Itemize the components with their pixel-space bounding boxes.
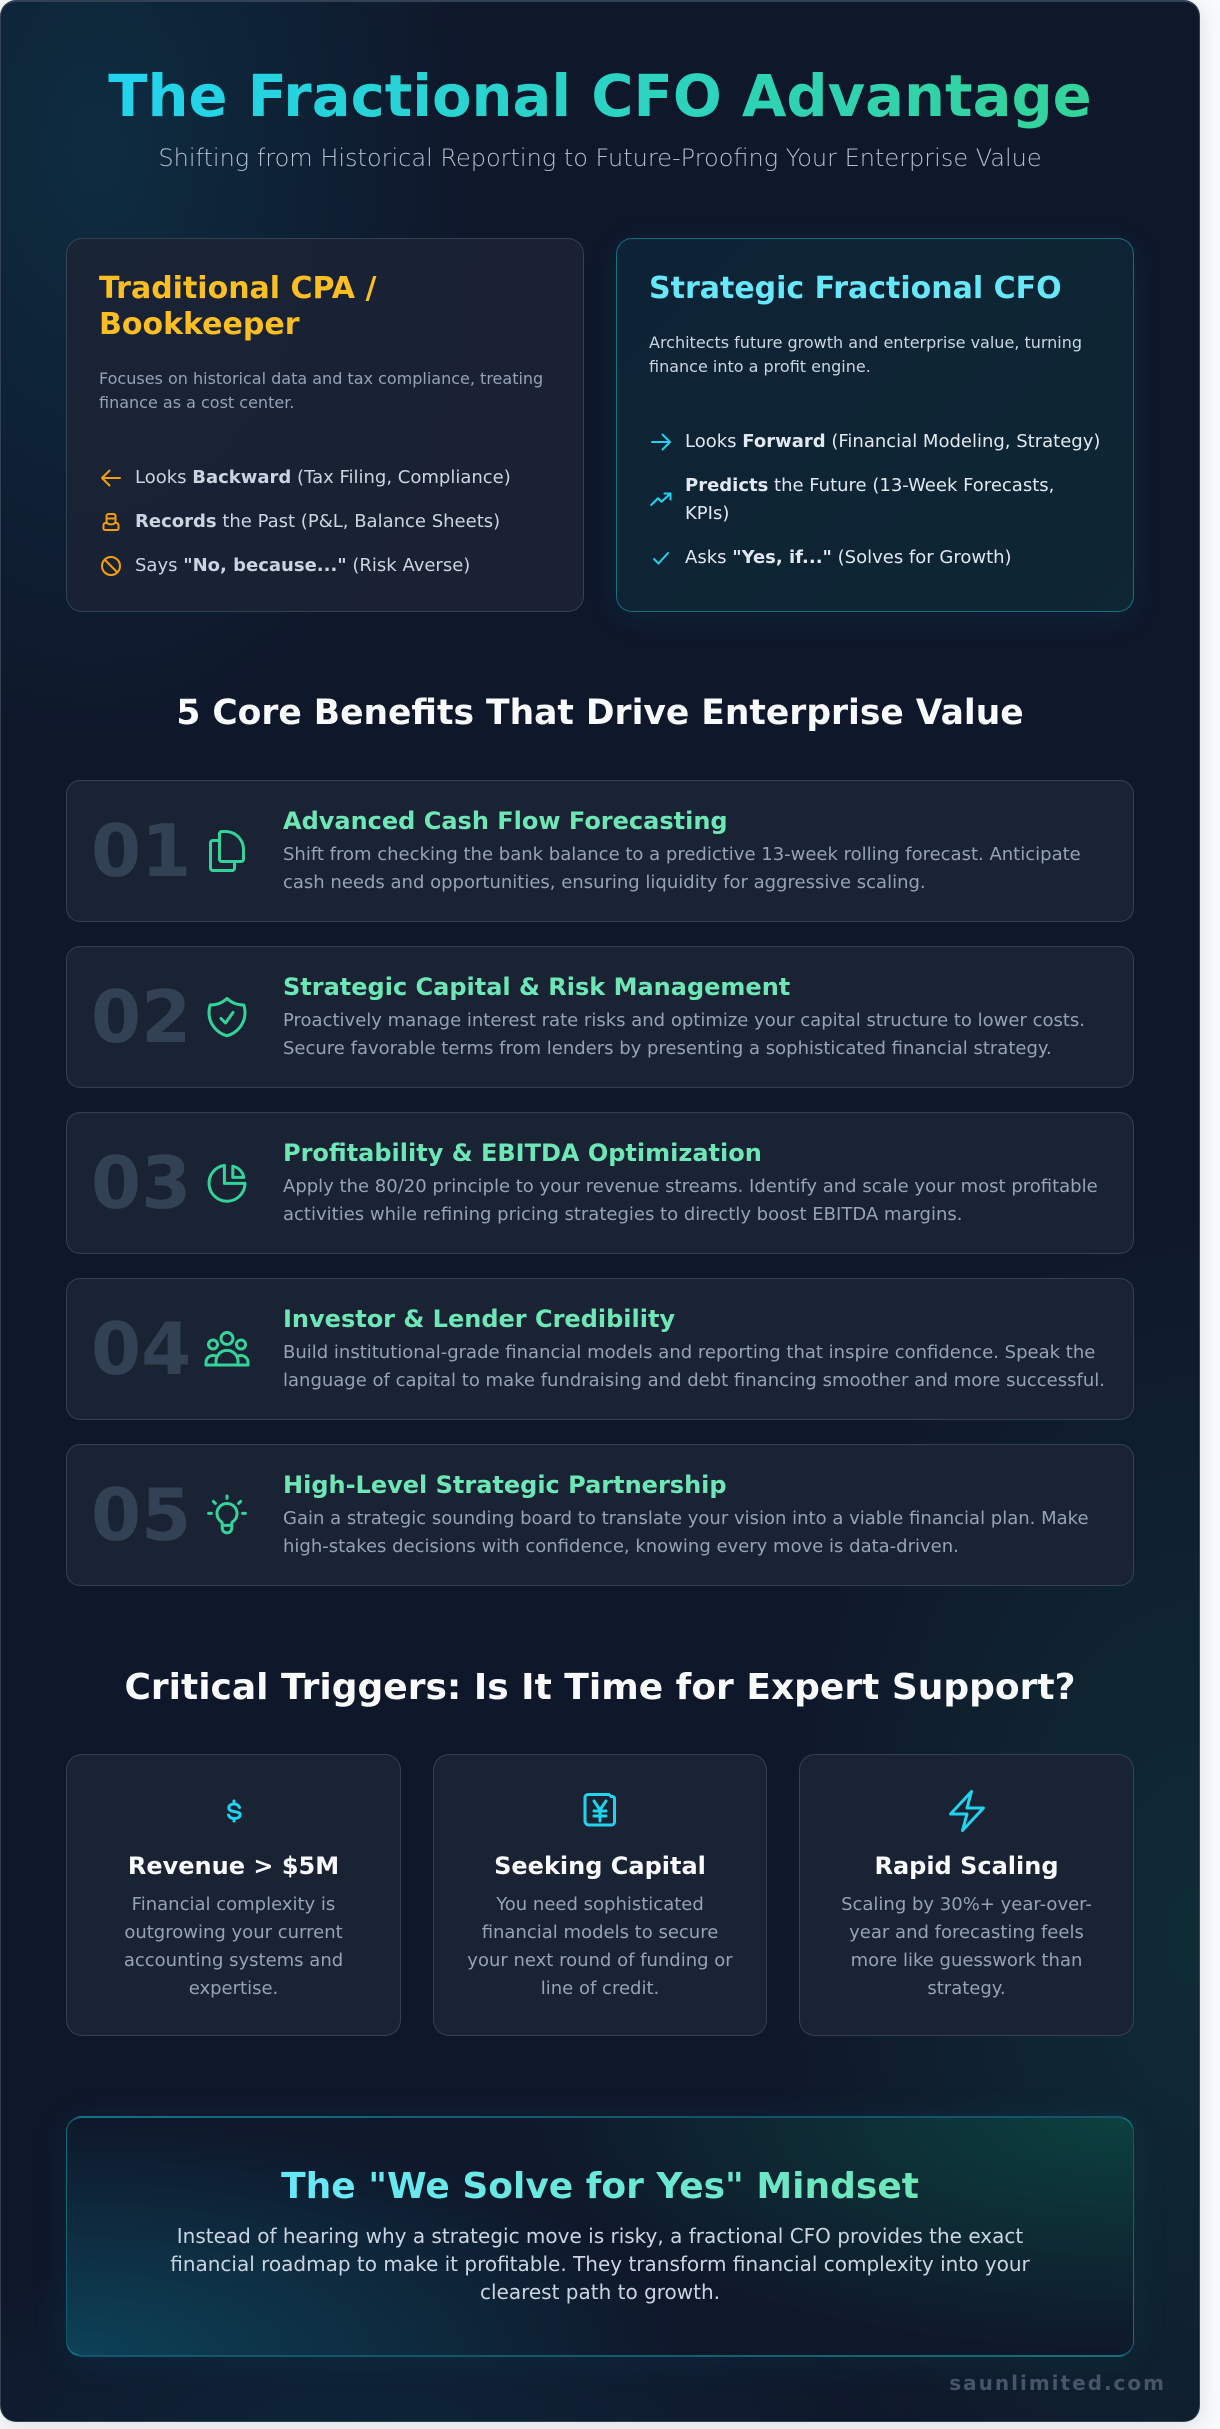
benefit title: Strategic Capital & Risk Management [283, 973, 790, 1001]
heading: traditional CPA: Bookkeeper [99, 307, 300, 342]
benefit description: Shift from checking the bank balance to a predictive 13-week rolling forecast. Anticipate [283, 844, 1081, 865]
benefit description: Apply the 80/20 principle to your revenue streams. Identify and scale your most profitable [283, 1176, 1098, 1197]
benefit description [283, 844, 1081, 893]
benefit description [283, 1176, 1098, 1225]
panel: strategic fractional CFO: Asks "Yes, if..." (Solves for Growth) [685, 547, 1012, 568]
benefit title: Profitability & EBITDA Optimization [283, 1139, 762, 1167]
benefit description: Gain a strategic sounding board to translate your vision into a viable financial plan. Make [283, 1508, 1089, 1529]
trigger card: revenue [66, 1754, 401, 2036]
panel: traditional CPA: Looks Backward (Tax Filing, Compliance) [135, 467, 511, 488]
subtitle: Shifting from Historical Reporting to Future-Proofing Your Enterprise Value [158, 144, 1042, 172]
icon: lightning bolt [949, 1790, 985, 1832]
panel: strategic fractional CFO [616, 238, 1134, 612]
benefit description: Build institutional-grade financial models and reporting that inspire confidence. Speak the [283, 1342, 1095, 1363]
icon: documents [209, 830, 245, 872]
trigger title: Revenue > $5M [128, 1852, 339, 1880]
icon: records [102, 513, 120, 531]
list item: looks forward [651, 431, 1100, 452]
number 02: 02 [91, 975, 191, 1059]
trigger description [124, 1894, 343, 1999]
benefit description: high-stakes decisions with confidence, knowing every move is data-driven. [283, 1536, 959, 1557]
list item: asks yes if [653, 547, 1012, 568]
panel: traditional CPA: Says "No, because..." (Risk Averse) [135, 555, 470, 576]
watermark: saunlimited.com [949, 2371, 1166, 2395]
callout: we solve for yes [66, 2116, 1134, 2357]
panel: strategic fractional CFO: KPIs) [685, 503, 729, 524]
trigger description: Financial complexity is [132, 1894, 335, 1915]
list item: says no [101, 555, 470, 576]
icon: dollar [227, 1800, 242, 1822]
icon: light bulb [207, 1494, 247, 1534]
callout text: financial roadmap to make it profitable. They transform financial complexity into your [170, 2252, 1030, 2276]
benefit card 01 [66, 780, 1134, 922]
icon: yen document [584, 1793, 616, 1826]
heading: traditional CPA [99, 271, 376, 342]
benefit card 02 [66, 946, 1134, 1088]
panel: strategic fractional CFO: Predicts the Future (13-Week Forecasts, [685, 475, 1054, 496]
benefit description: language of capital to make fundraising and debt financing smoother and more successful. [283, 1370, 1105, 1391]
trigger description: financial models to secure [482, 1922, 718, 1943]
benefit card 05 [66, 1444, 1134, 1586]
number 03: 03 [91, 1141, 191, 1225]
number 04: 04 [91, 1307, 191, 1391]
heading: strategic fractional CFO: Strategic Fractional CFO [649, 271, 1062, 306]
text: strategic description [649, 333, 1082, 376]
number 05: 05 [91, 1473, 191, 1557]
trigger description: You need sophisticated [496, 1894, 704, 1915]
list item: predicts the future [650, 475, 1054, 524]
benefit description: cash needs and opportunities, ensuring liquidity for aggressive scaling. [283, 872, 926, 893]
heading: critical triggers: Critical Triggers: Is It Time for Expert Support? [124, 1667, 1076, 1708]
benefit card 03 [66, 1112, 1134, 1254]
icon: shield check [208, 996, 246, 1038]
icon: user group [204, 1331, 250, 1366]
trigger description: your next round of funding or [467, 1950, 733, 1971]
icon: trending up [650, 492, 672, 506]
trigger description [841, 1894, 1092, 1999]
trigger description: more like guesswork than [851, 1950, 1082, 1971]
list item: records the past [102, 511, 500, 532]
trigger description: outgrowing your current [124, 1922, 343, 1943]
callout text: clearest path to growth. [480, 2280, 720, 2304]
callout text [170, 2224, 1030, 2304]
icon: no symbol [101, 556, 121, 576]
trigger description: expertise. [189, 1978, 278, 1999]
text: traditional description [99, 369, 543, 412]
icon: arrow left [101, 470, 121, 486]
trigger description: line of credit. [541, 1978, 659, 1999]
trigger description: year and forecasting feels [849, 1922, 1084, 1943]
heading: traditional CPA: Traditional CPA / [99, 271, 376, 306]
trigger card: rapid scaling [799, 1754, 1134, 2036]
callout text: Instead of hearing why a strategic move is risky, a fractional CFO provides the exact [177, 2224, 1023, 2248]
trigger description: strategy. [927, 1978, 1006, 1999]
benefit description [283, 1010, 1085, 1059]
icon: arrow right [651, 434, 671, 450]
trigger card: seeking capital [433, 1754, 767, 2036]
benefit description: Secure favorable terms from lenders by presenting a sophisticated financial strategy. [283, 1038, 1052, 1059]
trigger description: Scaling by 30%+ year-over- [841, 1894, 1092, 1915]
icon: pie chart [208, 1164, 246, 1203]
benefit description: Proactively manage interest rate risks and optimize your capital structure to lower costs. [283, 1010, 1085, 1031]
trigger title: Rapid Scaling [874, 1852, 1059, 1880]
number 01: 01 [91, 809, 191, 893]
benefit description [283, 1508, 1089, 1557]
benefit card 04 [66, 1278, 1134, 1420]
heading: core benefits: 5 Core Benefits That Drive Enterprise Value [176, 693, 1024, 733]
text: strategic description: Architects future growth and enterprise value, turning [649, 333, 1082, 352]
panel: traditional CPA: Records the Past (P&L, Balance Sheets) [135, 511, 500, 532]
benefit title: Investor & Lender Credibility [283, 1305, 675, 1333]
trigger title: Seeking Capital [494, 1852, 706, 1880]
text: traditional description: finance as a cost center. [99, 393, 294, 412]
list item: looks backward [101, 467, 511, 488]
trigger description [467, 1894, 733, 1999]
benefit description [283, 1342, 1105, 1391]
title: The Fractional CFO Advantage [108, 63, 1092, 130]
panel: strategic fractional CFO: Looks Forward (Financial Modeling, Strategy) [685, 431, 1100, 452]
benefit description: activities while refining pricing strategies to directly boost EBITDA margins. [283, 1204, 962, 1225]
callout heading: The "We Solve for Yes" Mindset [281, 2166, 919, 2207]
benefit title: High-Level Strategic Partnership [283, 1471, 727, 1499]
panel: traditional CPA [66, 238, 584, 612]
icon: check [653, 552, 669, 564]
trigger description: accounting systems and [124, 1950, 343, 1971]
text: strategic description: finance into a profit engine. [649, 357, 871, 376]
text: traditional description: Focuses on historical data and tax compliance, treating [99, 369, 543, 388]
benefit title: Advanced Cash Flow Forecasting [283, 807, 728, 835]
